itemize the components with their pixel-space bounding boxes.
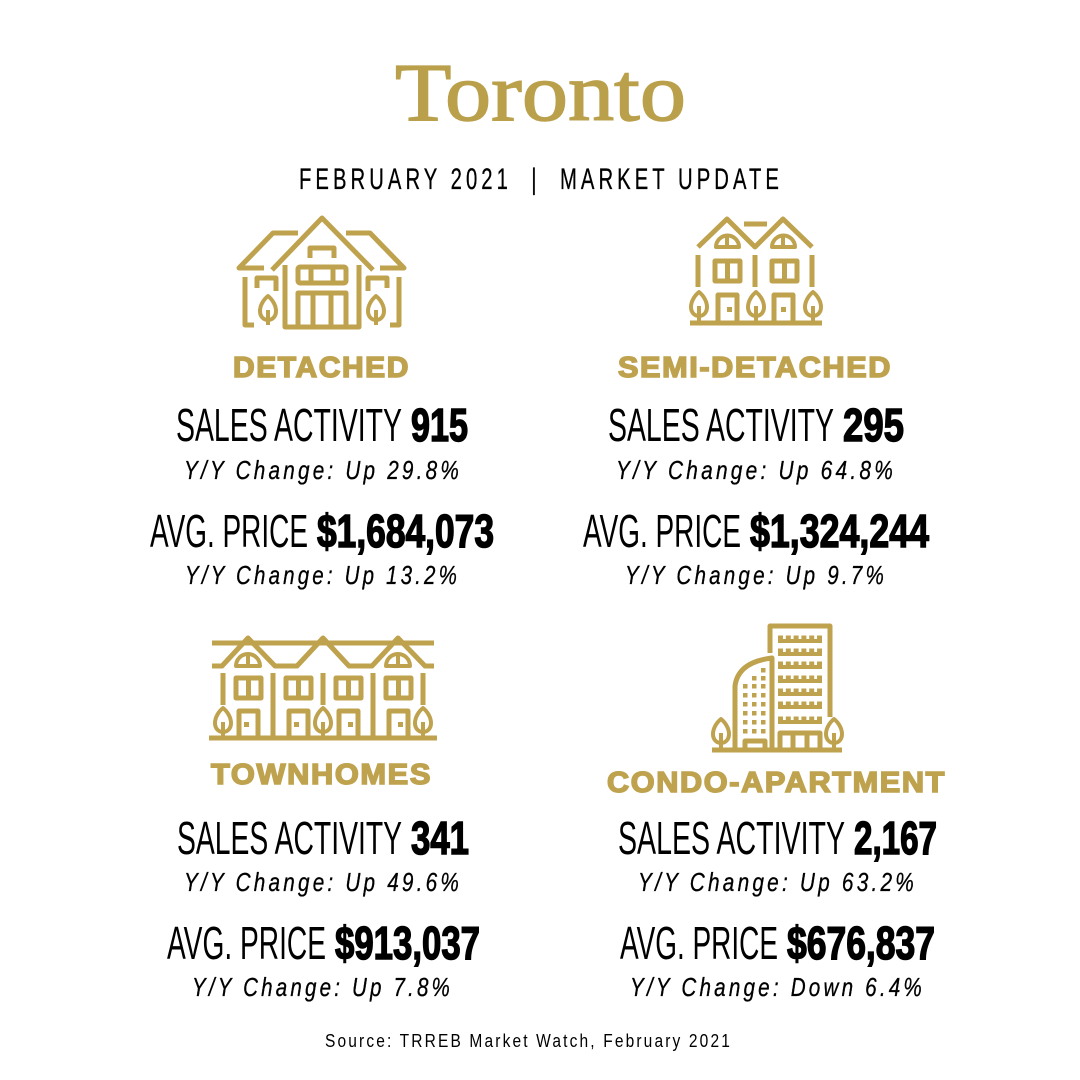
source note: Source: TRREB Market Watch, February 2021 <box>325 1031 732 1051</box>
subtitle: FEBRUARY 2021 | MARKET UPDATE <box>299 163 783 196</box>
icon: semi-detached houses <box>690 219 822 323</box>
average price: AVG. PRICE <box>583 505 741 557</box>
sales activity: SALES ACTIVITY <box>608 399 834 451</box>
average price: $913,037 <box>335 917 480 969</box>
heading: semi-detached: SEMI-DETACHED <box>618 352 892 384</box>
price change: Y/Y Change: Up 7.8% <box>192 972 453 1002</box>
sales activity: SALES ACTIVITY <box>176 399 402 451</box>
panel: detached <box>150 218 494 590</box>
panel: townhomes <box>167 638 480 1002</box>
heading: detached: DETACHED <box>233 352 410 384</box>
price change: Y/Y Change: Down 6.4% <box>630 972 925 1002</box>
price change: Y/Y Change: Up 9.7% <box>625 560 887 590</box>
icon: townhomes <box>209 638 437 738</box>
average price: AVG. PRICE <box>620 917 778 969</box>
panel: semi-detached <box>583 219 929 590</box>
average price: $1,324,244 <box>750 505 929 557</box>
average price: AVG. PRICE <box>167 917 326 969</box>
average price: AVG. PRICE <box>150 505 308 557</box>
title: Toronto <box>395 46 686 138</box>
heading: townhomes: TOWNHOMES <box>211 759 432 791</box>
sales activity: SALES ACTIVITY <box>177 812 402 864</box>
sales activity: SALES ACTIVITY <box>618 812 845 864</box>
heading: condo-apartment: CONDO-APARTMENT <box>607 767 946 799</box>
sales activity: 341 <box>411 812 469 864</box>
sales activity: 915 <box>411 399 468 451</box>
sales change: Y/Y Change: Up 64.8% <box>616 455 896 485</box>
sales change: Y/Y Change: Up 63.2% <box>638 867 917 897</box>
sales change: Y/Y Change: Up 49.6% <box>184 867 462 897</box>
sales activity: 295 <box>843 399 904 451</box>
icon: condo building <box>712 626 842 750</box>
icon: detached house <box>239 218 404 327</box>
average price: $676,837 <box>787 917 935 969</box>
average price: $1,684,073 <box>317 505 494 557</box>
panel: condo-apartment <box>607 626 946 1002</box>
sales activity: 2,167 <box>854 812 937 864</box>
price change: Y/Y Change: Up 13.2% <box>185 560 460 590</box>
sales change: Y/Y Change: Up 29.8% <box>184 455 462 485</box>
